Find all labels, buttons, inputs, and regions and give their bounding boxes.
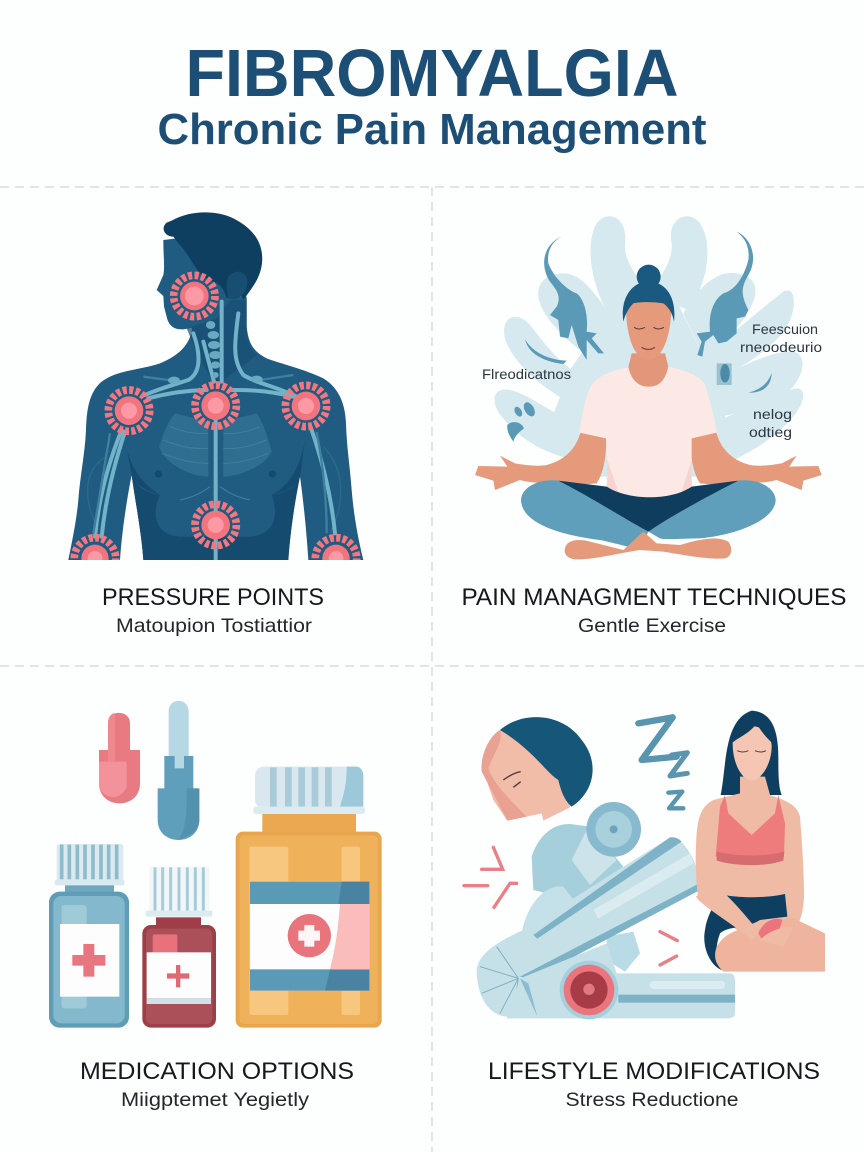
feet xyxy=(565,532,731,559)
right arm xyxy=(691,432,822,490)
panel: lifestyle modifications xyxy=(464,711,825,1111)
small floating labels: Feescuion xyxy=(752,321,818,337)
ear xyxy=(227,272,247,299)
title xyxy=(158,36,707,154)
title: FIBROMYALGIA xyxy=(186,36,678,111)
panel: pain management techniques xyxy=(462,216,846,637)
heading: techniques: PAIN MANAGMENT TECHNIQUES xyxy=(462,584,846,611)
icon: blue bottle xyxy=(49,844,129,1028)
pressure point: left wrist xyxy=(70,534,120,560)
neck xyxy=(628,353,668,388)
t-shirt xyxy=(579,367,717,503)
pressure point: abdomen xyxy=(195,504,236,546)
icon: red bottle xyxy=(142,867,216,1028)
lower torso shade xyxy=(132,475,300,560)
icon: large yellow bottle xyxy=(236,767,382,1028)
rib cage xyxy=(159,413,208,477)
neck shade xyxy=(187,300,257,387)
heading: medication: MEDICATION OPTIONS xyxy=(80,1058,354,1085)
massage device xyxy=(477,802,735,1019)
nipples xyxy=(155,470,162,478)
pressure point: left shoulder xyxy=(108,390,150,431)
spine xyxy=(168,321,263,384)
nerves xyxy=(95,302,335,560)
illustration: body with pressure points xyxy=(68,212,363,579)
blue animal shapes xyxy=(507,232,772,442)
pain sparks xyxy=(464,847,677,965)
heading: lifestyle: LIFESTYLE MODIFICATIONS xyxy=(488,1058,820,1085)
body silhouette xyxy=(68,297,363,560)
small floating labels: Flreodicatnos xyxy=(482,366,571,382)
head and face xyxy=(626,301,671,360)
pressure point: right wrist xyxy=(312,534,360,560)
headache head xyxy=(481,717,593,821)
small floating labels: odtieg xyxy=(749,424,792,440)
pressure point: jaw xyxy=(174,275,215,317)
caption: pressure points: Matoupion Tostiattior xyxy=(116,615,313,637)
arm muscles xyxy=(88,447,341,533)
title: Chronic Pain Management xyxy=(158,105,707,154)
caption: lifestyle: Stress Reductione xyxy=(566,1089,738,1111)
seated woman xyxy=(696,711,825,972)
facial features xyxy=(634,327,664,329)
illustration: lifestyle scene xyxy=(464,711,825,1019)
panel: pressure points xyxy=(68,212,363,637)
small floating labels: rneoodeurio xyxy=(740,339,822,355)
small floating labels: nelog xyxy=(753,406,792,422)
heading: pressure points: PRESSURE POINTS xyxy=(102,584,324,611)
small floating labels xyxy=(482,321,822,440)
hair and bun xyxy=(623,282,674,322)
face xyxy=(156,238,226,330)
hair xyxy=(164,212,262,300)
pressure point: right shoulder xyxy=(285,385,327,427)
panel: medication options xyxy=(49,701,382,1111)
icon: blue dropper xyxy=(158,701,199,840)
icon: pink capsule xyxy=(99,713,140,803)
pressure point: chest xyxy=(195,385,236,426)
illustration: meditating person xyxy=(475,216,822,559)
trousers xyxy=(558,481,738,532)
caption: techniques: Gentle Exercise xyxy=(578,615,726,637)
left arm xyxy=(475,432,606,490)
caption: medication: Miigptemet Yegietly xyxy=(121,1089,309,1111)
medication illustration xyxy=(49,701,382,1028)
sleep Z letters xyxy=(638,717,687,808)
pale petals background xyxy=(494,216,803,497)
